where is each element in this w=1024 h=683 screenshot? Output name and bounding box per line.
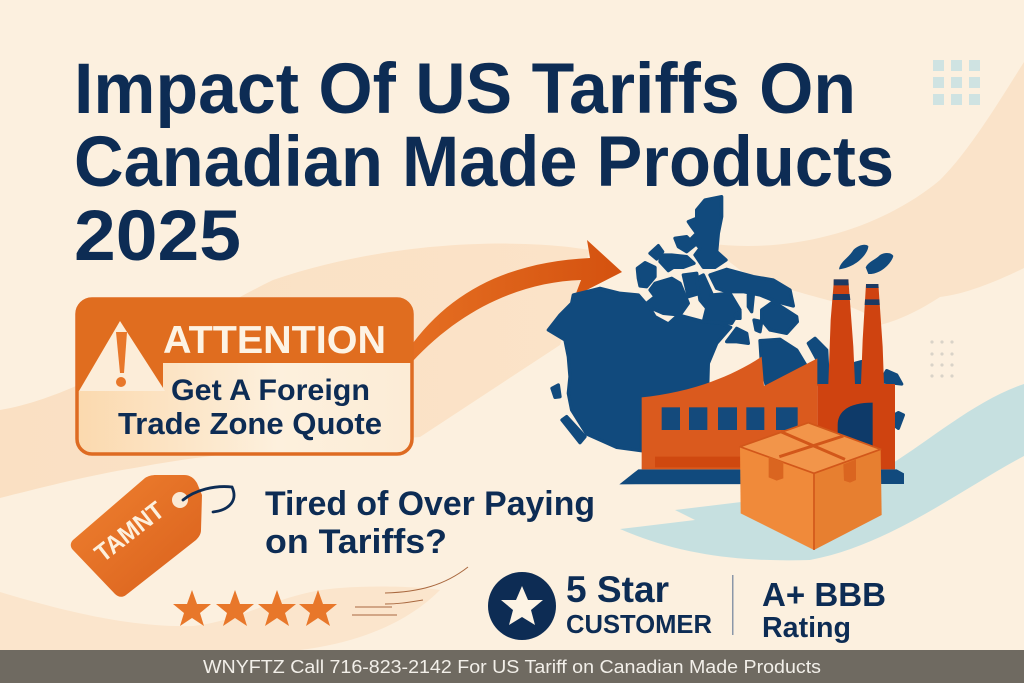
title bbox=[74, 50, 894, 276]
tagline: on Tariffs? bbox=[265, 523, 447, 561]
ATTENTION label: ATTENTION bbox=[163, 319, 386, 362]
tagline bbox=[265, 485, 595, 561]
tag string bbox=[183, 487, 234, 512]
five star customer text: CUSTOMER bbox=[566, 611, 712, 639]
BBB rating text bbox=[762, 576, 886, 644]
warning triangle bbox=[79, 321, 165, 391]
background swoosh: lower left peach band bbox=[0, 587, 440, 650]
decorative dot grid: teal bbox=[933, 60, 980, 105]
tag label: TAMNT bbox=[89, 496, 170, 568]
exclamation mark bbox=[116, 332, 127, 387]
BBB rating text: A+ BBB bbox=[762, 576, 886, 613]
speed lines bbox=[352, 567, 468, 615]
background swoosh: left peach band bbox=[0, 244, 590, 498]
quote text: Trade Zone Quote bbox=[118, 406, 382, 441]
attention banner bbox=[77, 298, 413, 454]
factory smoke bbox=[839, 245, 893, 274]
factory main hall bbox=[642, 357, 817, 469]
map of Canada bbox=[548, 197, 903, 451]
factory windows bbox=[662, 407, 798, 430]
illustration: Canada map, factory and box bbox=[548, 197, 904, 550]
factory base bbox=[619, 469, 904, 484]
factory smokestacks and tall block bbox=[817, 279, 895, 469]
banner header bbox=[77, 298, 413, 391]
background swoosh: upper right peach band bbox=[705, 62, 1024, 325]
background swoosh: teal band bbox=[620, 384, 1024, 560]
price tag icon bbox=[71, 475, 234, 597]
five star badge icon bbox=[488, 572, 556, 640]
decorative dot grid: grey bbox=[930, 340, 954, 378]
title: Canadian Made Products bbox=[74, 123, 894, 202]
title: Impact Of US Tariffs On bbox=[74, 50, 856, 129]
five star customer text bbox=[566, 569, 712, 639]
banner body bbox=[77, 299, 412, 454]
factory lower shadow strip bbox=[655, 457, 747, 467]
quote text: Get A Foreign bbox=[171, 374, 370, 407]
five star customer text: 5 Star bbox=[566, 569, 669, 610]
tagline: Tired of Over Paying bbox=[265, 485, 595, 523]
footer bar: WNYFTZ Call 716-823-2142 For US Tariff on Canadian Made Products bbox=[203, 657, 821, 677]
cardboard box bbox=[740, 423, 882, 550]
four stars bbox=[173, 590, 337, 626]
quote text bbox=[118, 374, 382, 441]
divider bbox=[732, 575, 734, 635]
BBB rating text: Rating bbox=[762, 612, 851, 644]
arrow: from attention banner to Canada bbox=[408, 240, 622, 362]
title: 2025 bbox=[74, 197, 241, 276]
footer bar bbox=[0, 650, 1024, 683]
factory door bbox=[838, 403, 873, 447]
